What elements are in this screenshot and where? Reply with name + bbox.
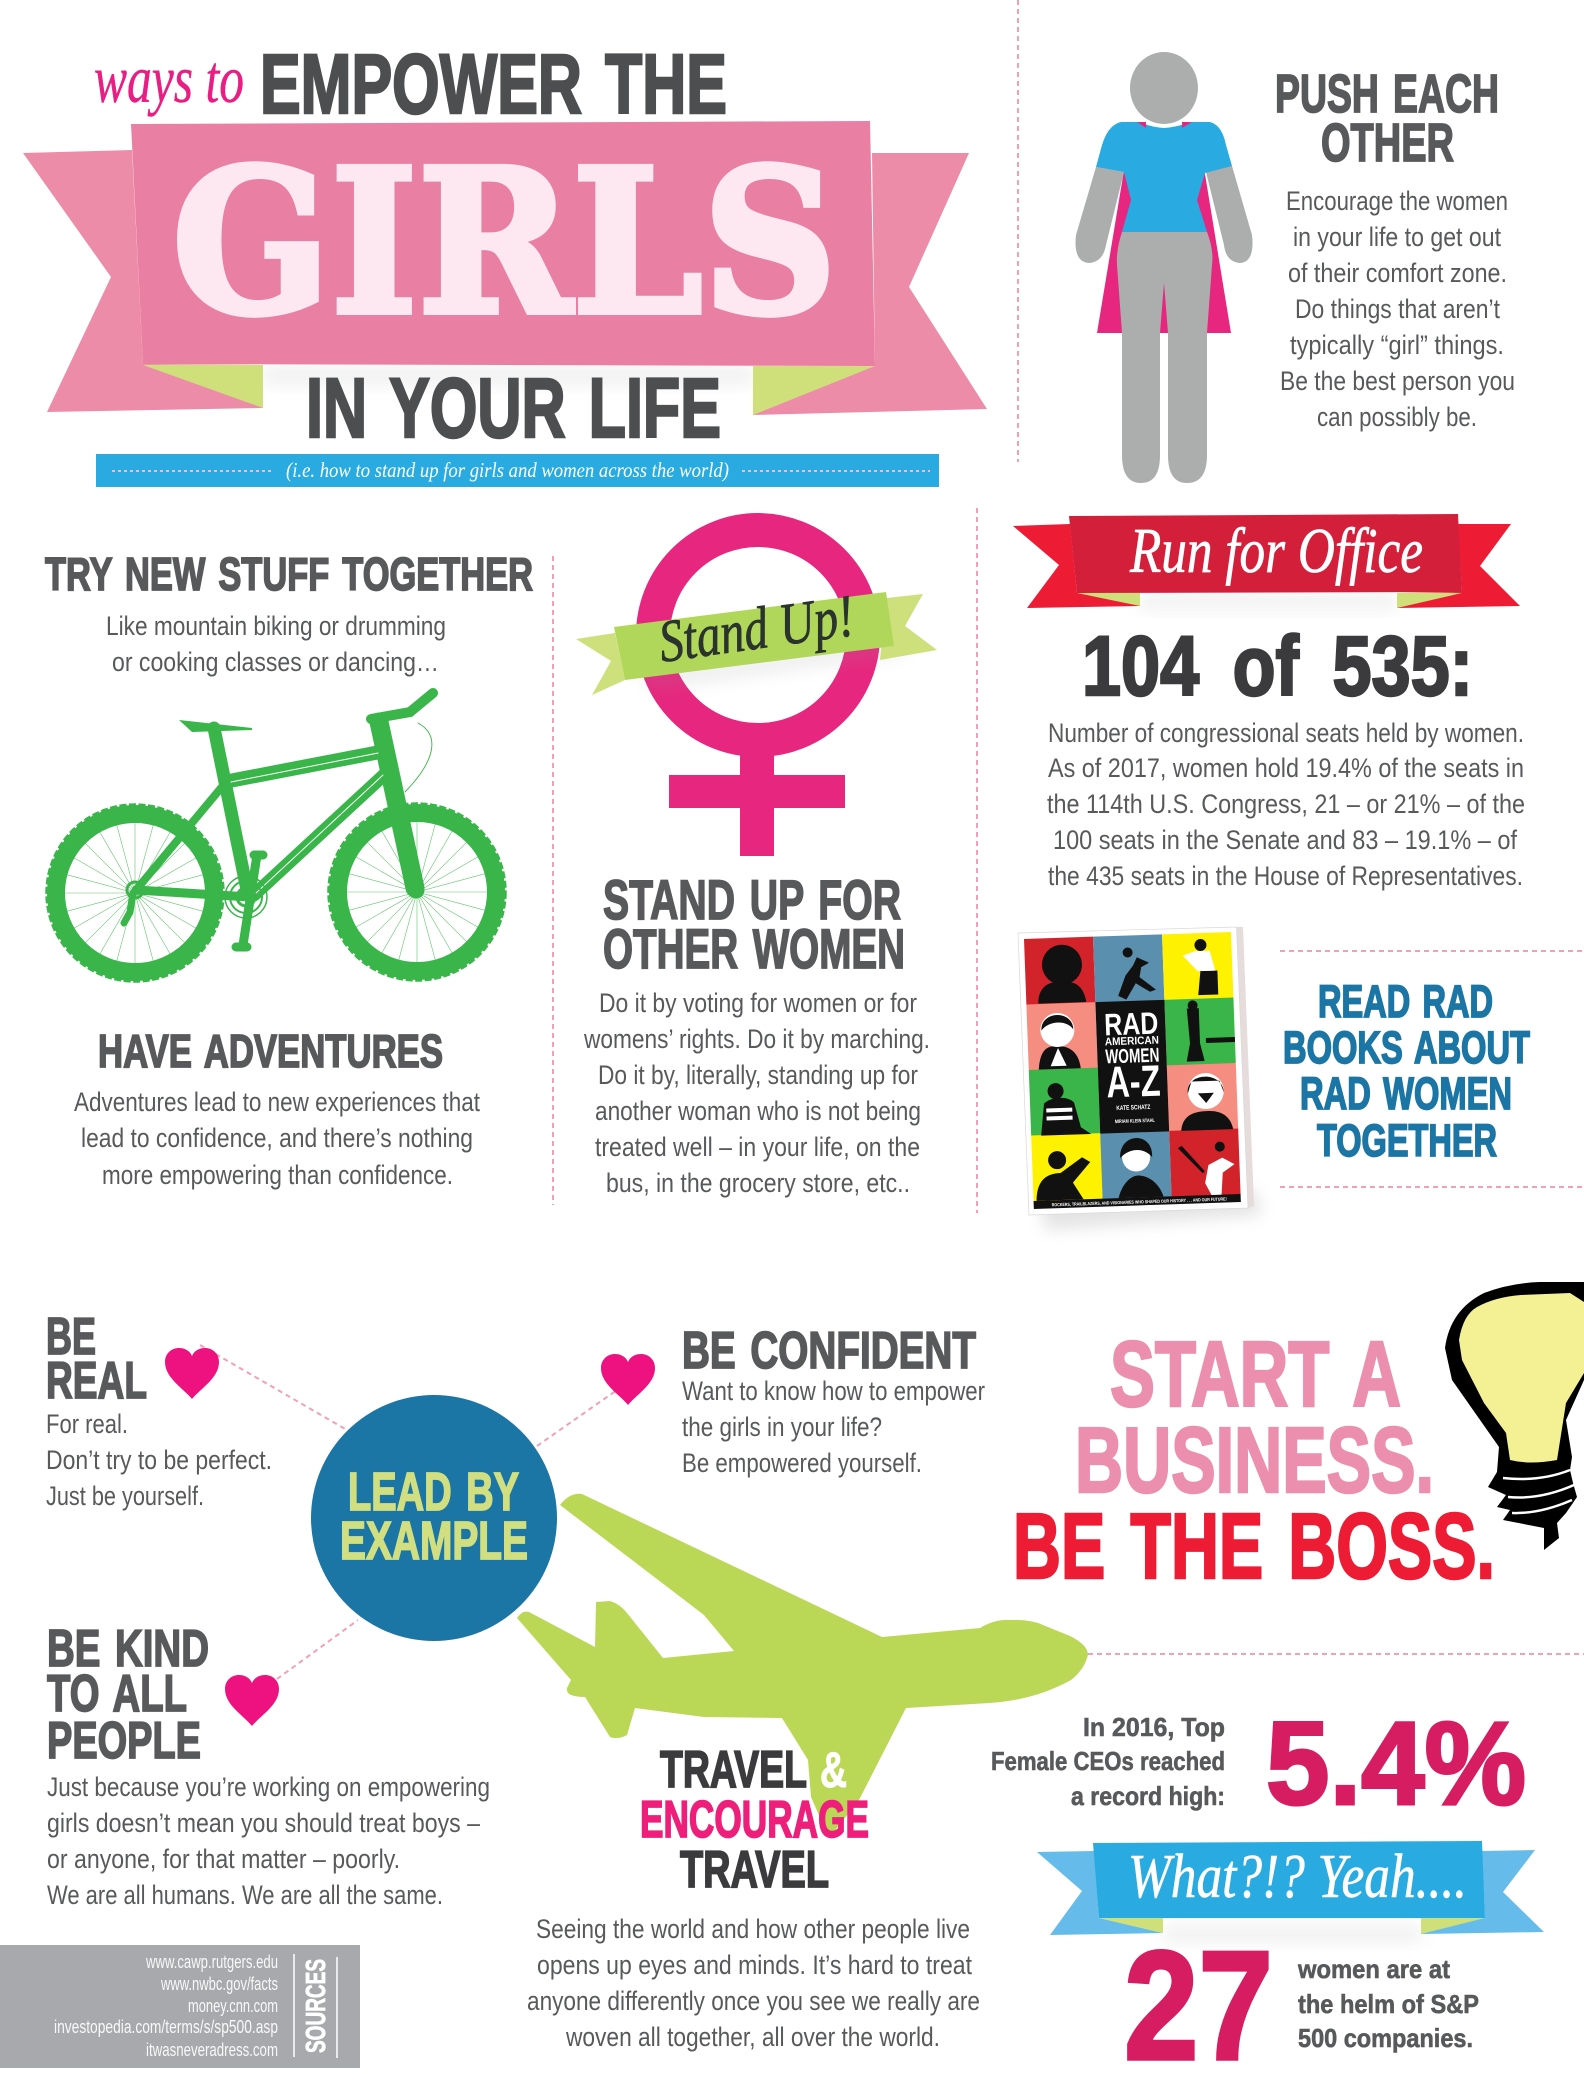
- block: push each other: of their comfort zone.: [1288, 258, 1507, 288]
- portrait silhouettes: [1027, 938, 1241, 1201]
- block: try new stuff together: or cooking classes or dancing…: [112, 647, 439, 677]
- statistic: 104 of 535: 104 of 535:: [1082, 619, 1473, 713]
- block: travel and encourage travel: opens up eyes and minds. It’s hard to treat: [537, 1950, 972, 1980]
- text block: congressional seats: [1047, 718, 1525, 891]
- block: travel and encourage travel: ENCOURAGE: [640, 1791, 869, 1849]
- icon: female symbol with ribbon: [576, 530, 937, 856]
- front wheel: [329, 804, 505, 980]
- subtitle bar: (i.e. how to stand up for girls and women across the world): [286, 458, 729, 482]
- text block: congressional seats: 100 seats in the Senate and 83 – 19.1% – of: [1053, 825, 1517, 855]
- ribbon left tail: [23, 150, 263, 412]
- block: travel and encourage travel: TRAVEL: [660, 1741, 807, 1799]
- block: have adventures: HAVE ADVENTURES: [98, 1025, 443, 1077]
- block: try new stuff together: [45, 548, 533, 677]
- text: what yeah: What?!? Yeah....: [1128, 1843, 1467, 1911]
- block: travel and encourage travel: Seeing the world and how other people live: [536, 1914, 970, 1944]
- block: be confident: Want to know how to empower: [682, 1376, 985, 1406]
- heading: girls: GIRLS: [172, 125, 837, 359]
- block: be kind to all people: or anyone, for that matter – poorly.: [47, 1844, 400, 1874]
- block: be kind to all people: girls doesn’t mean you should treat boys –: [47, 1808, 480, 1838]
- block: travel and encourage travel: &: [820, 1742, 847, 1798]
- heading: in your life: IN YOUR LIFE: [306, 361, 721, 455]
- block: push each other: in your life to get out: [1293, 222, 1501, 252]
- heading: read rad books: [1283, 976, 1530, 1166]
- block: be kind to all people: TO ALL: [47, 1665, 187, 1723]
- block: have adventures: Adventures lead to new experiences that: [74, 1087, 480, 1117]
- banner: what yeah: [1037, 1841, 1544, 1942]
- block: push each other: Be the best person you: [1280, 366, 1515, 396]
- icon: heart: [165, 1348, 219, 1399]
- ribbon tails: [576, 594, 937, 695]
- ribbon main panel: [131, 121, 875, 366]
- frame: [124, 693, 433, 947]
- text block: congressional seats: the 114th U.S. Congress, 21 – or 21% – of the: [1047, 789, 1525, 819]
- icon: heart: [601, 1354, 655, 1405]
- block: stand up for other women: bus, in the grocery store, etc..: [606, 1168, 910, 1198]
- subtitle bar: [96, 454, 939, 487]
- ribbon shadow: [263, 366, 753, 385]
- ribbon shadow: [640, 638, 905, 690]
- block: top female CEOs: [991, 1712, 1225, 1811]
- block: be kind to all people: PEOPLE: [47, 1712, 201, 1770]
- panel: sources: investopedia.com/terms/s/sp500.asp: [54, 2017, 278, 2037]
- block: top female CEOs: a record high:: [1071, 1781, 1225, 1811]
- statistic: 5.4 percent: 5.4%: [1266, 1698, 1526, 1830]
- text: stand up: Stand Up!: [655, 582, 858, 675]
- block: push each other: Encourage the women: [1286, 186, 1508, 216]
- block: be confident: Be empowered yourself.: [682, 1448, 922, 1478]
- ribbon right tail: [753, 153, 987, 415]
- block: be confident: [682, 1322, 985, 1478]
- rear wheel: [47, 805, 223, 981]
- block: be confident: BE CONFIDENT: [682, 1322, 976, 1380]
- panel: sources: [0, 1945, 360, 2068]
- book cover: A-Z: [1105, 1057, 1161, 1107]
- text: ways to: ways to: [94, 41, 244, 117]
- book cover: MIRIAM KLEIN STAHL: [1115, 1118, 1155, 1125]
- ribbon main: [614, 592, 894, 680]
- heading: empower the: EMPOWER THE: [260, 37, 727, 131]
- block: have adventures: more empowering than confidence.: [102, 1160, 453, 1190]
- block: stand up for other women: STAND UP FOR: [603, 868, 901, 931]
- block: try new stuff together: TRY NEW STUFF TOGETHER: [45, 548, 533, 600]
- female symbol: [653, 530, 863, 856]
- book cover: ROCKERS, TRAILBLAZERS, AND VISIONARIES WHO SHAPED OUR HISTORY . . . AND OUR FUTURE!: [1052, 1196, 1227, 1207]
- block: top female CEOs: Female CEOs reached: [991, 1746, 1225, 1776]
- block: top female CEOs: In 2016, Top: [1083, 1712, 1225, 1742]
- block: stand up for other women: Do it by voting for women or for: [599, 988, 917, 1018]
- block: stand up for other women: womens’ rights. Do it by marching.: [583, 1024, 930, 1054]
- panel: sources: itwasneveradress.com: [146, 2040, 278, 2060]
- heading: read rad books: TOGETHER: [1317, 1115, 1497, 1166]
- circle: lead by example: LEAD BY: [348, 1462, 519, 1522]
- block: have adventures: [74, 1025, 480, 1190]
- icon: light bulb: [1445, 1282, 1584, 1550]
- heading: read rad books: READ RAD: [1318, 976, 1493, 1027]
- block: travel and encourage travel: [527, 1741, 980, 2052]
- block: stand up for other women: [583, 868, 930, 1198]
- block: travel and encourage travel: TRAVEL: [680, 1841, 829, 1899]
- icon: bicycle: [47, 693, 505, 981]
- block: stand up for other women: Do it by, literally, standing up for: [598, 1060, 918, 1090]
- block: be kind to all people: Just because you’re working on empowering: [47, 1772, 490, 1802]
- block: be real: For real.: [46, 1409, 128, 1439]
- panel: sources: www.cawp.rutgers.edu: [145, 1952, 278, 1972]
- book cover: WOMEN: [1105, 1045, 1160, 1068]
- text: run for office: Run for Office: [1129, 515, 1423, 586]
- block: women at the helm: 500 companies.: [1298, 2023, 1473, 2053]
- block: women at the helm: women are at: [1297, 1954, 1450, 1984]
- block: be real: Just be yourself.: [46, 1481, 204, 1511]
- block: travel and encourage travel: anyone differently once you see we really are: [527, 1986, 980, 2016]
- banner: run for office: [1013, 514, 1520, 610]
- block: push each other: can possibly be.: [1317, 402, 1477, 432]
- heading: start a business: [1013, 1322, 1495, 1598]
- block: have adventures: lead to confidence, and there’s nothing: [81, 1123, 473, 1153]
- book cover: KATE SCHATZ: [1116, 1104, 1150, 1112]
- block: women at the helm: [1297, 1954, 1479, 2053]
- block: stand up for other women: OTHER WOMEN: [603, 917, 905, 980]
- heading: start a business: START A: [1110, 1322, 1401, 1426]
- block: be real: [46, 1308, 272, 1511]
- panel: sources: www.nwbc.gov/facts: [160, 1974, 278, 1994]
- icon: heart: [225, 1675, 279, 1726]
- ribbon folds: [143, 365, 875, 415]
- panel: sources: SOURCES: [300, 1959, 331, 2053]
- heading: read rad books: RAD WOMEN: [1300, 1068, 1512, 1119]
- title banner: [23, 37, 987, 487]
- block: women at the helm: the helm of S&P: [1298, 1989, 1479, 2019]
- block: stand up for other women: treated well – in your life, on the: [595, 1132, 920, 1162]
- book cover: RAD: [1104, 1006, 1159, 1042]
- block: be kind to all people: [47, 1620, 490, 1910]
- panel: sources: money.cnn.com: [188, 1996, 278, 2016]
- block: be kind to all people: BE KIND: [47, 1620, 209, 1678]
- icon: woman with cape: [1076, 52, 1252, 483]
- block: be real: Don’t try to be perfect.: [46, 1445, 272, 1475]
- icon: airplane: [517, 1494, 1088, 1838]
- block: be kind to all people: We are all humans. We are all the same.: [47, 1880, 443, 1910]
- block: push each other: OTHER: [1321, 113, 1454, 173]
- block: travel and encourage travel: woven all together, all over the world.: [565, 2022, 940, 2052]
- saddle: [179, 720, 252, 732]
- block: push each other: Do things that aren’t: [1295, 294, 1500, 324]
- block: push each other: [1275, 64, 1515, 432]
- book cover: AMERICAN: [1105, 1035, 1159, 1048]
- block: push each other: typically “girl” things.: [1290, 330, 1504, 360]
- book cover: [1018, 927, 1262, 1230]
- block: be confident: the girls in your life?: [682, 1412, 882, 1442]
- heading: start a business: BUSINESS.: [1075, 1408, 1434, 1512]
- block: be real: REAL: [46, 1352, 147, 1410]
- block: be real: BE: [46, 1308, 96, 1366]
- circle: lead by example: [311, 1395, 557, 1641]
- block: stand up for other women: another woman who is not being: [595, 1096, 921, 1126]
- circle: lead by example: EXAMPLE: [340, 1511, 528, 1571]
- text block: congressional seats: As of 2017, women hold 19.4% of the seats in: [1048, 753, 1524, 783]
- block: try new stuff together: Like mountain biking or drumming: [106, 611, 446, 641]
- statistic: 27: 27: [1124, 1919, 1273, 2088]
